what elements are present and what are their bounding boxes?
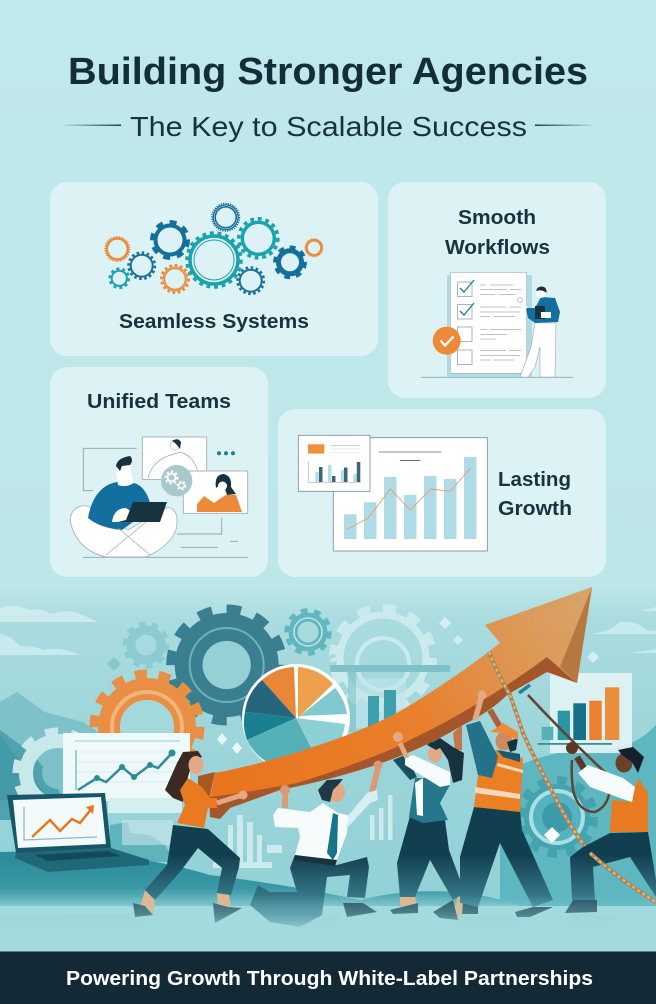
laptop — [7, 793, 149, 872]
right bar chart panel — [538, 673, 632, 753]
pale gear — [333, 608, 433, 708]
panel heading: Workflows — [445, 237, 550, 259]
gear and diamond on right hill — [521, 781, 593, 853]
scene background — [0, 582, 656, 952]
panel: smooth workflows — [388, 182, 606, 398]
person: man pulling rope — [565, 742, 656, 913]
title: Building Stronger Agencies — [68, 51, 588, 93]
panel: unified teams — [50, 367, 268, 577]
panel heading: Lasting — [498, 469, 571, 491]
large teal gear — [173, 611, 281, 719]
panel heading — [445, 207, 550, 259]
panel heading: Seamless Systems — [119, 311, 309, 333]
panel heading: Unified Teams — [87, 391, 231, 413]
person: kneeling man in white shirt — [250, 760, 382, 927]
dark rope behind arrow — [528, 695, 610, 812]
floor fade — [0, 895, 656, 952]
orange gear — [95, 675, 199, 779]
subtitle with side rules: The Key to Scalable Success — [130, 111, 527, 142]
line chart card — [63, 733, 190, 813]
lower left pale gear — [16, 731, 100, 815]
small gears — [125, 611, 329, 666]
background bar charts — [213, 690, 396, 868]
icon: checklist with person — [421, 272, 573, 377]
person: woman in teal jacket — [390, 725, 468, 920]
panel: lasting growth — [278, 409, 606, 577]
panel heading: Growth — [498, 498, 572, 520]
footer banner — [0, 952, 656, 1004]
panel: seamless systems — [50, 182, 378, 356]
icon: video call team — [70, 437, 248, 557]
panel heading — [498, 469, 572, 520]
pie chart — [242, 664, 350, 772]
beam and column — [330, 665, 450, 732]
person: woman in orange jacket — [133, 751, 248, 923]
growth arrow — [198, 587, 592, 819]
icon: cluster of gears — [105, 204, 323, 294]
rope lower run over man — [590, 853, 656, 902]
chart: growth bars with trend line — [333, 438, 487, 551]
scene: team lifting growth arrow — [0, 582, 656, 952]
rope — [489, 652, 656, 902]
chart: small report card — [298, 435, 370, 491]
diamonds — [107, 617, 599, 754]
footer banner: Powering Growth Through White-Label Partnerships — [66, 968, 593, 990]
person: man in orange safety vest — [460, 690, 553, 917]
panel heading: Smooth — [458, 207, 536, 229]
